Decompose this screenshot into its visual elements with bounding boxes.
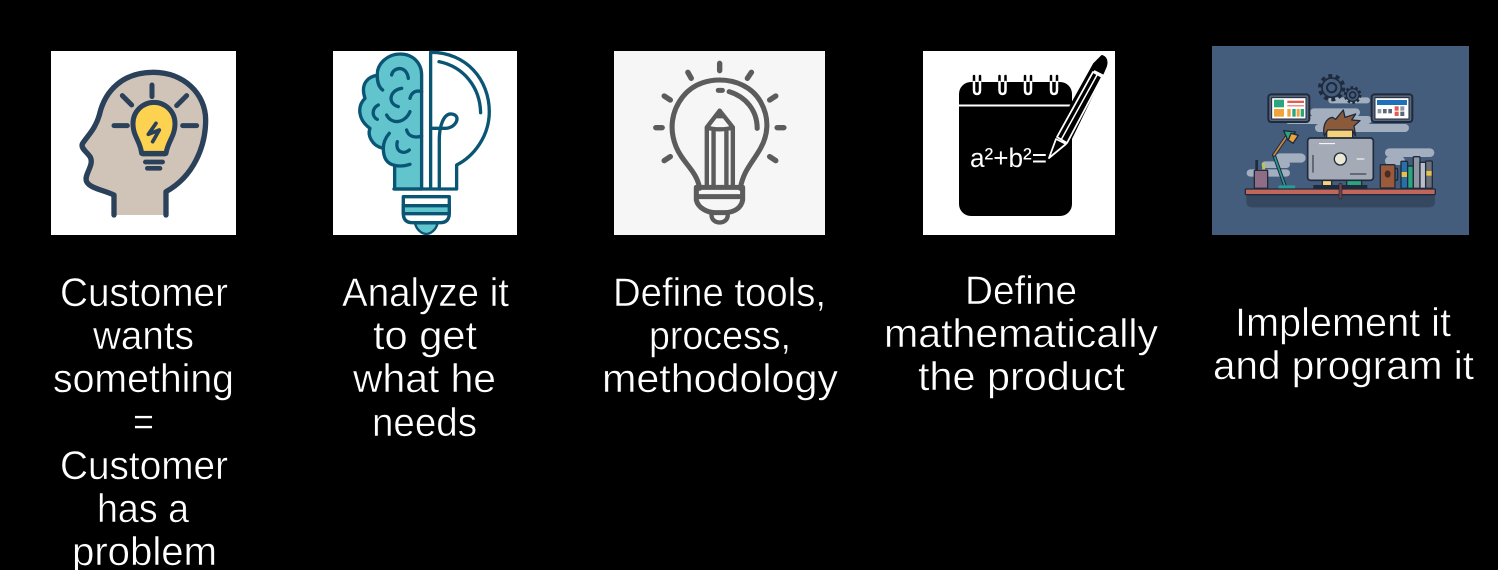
- icon: brain half: [360, 54, 422, 189]
- icon: spiral rings: [974, 76, 1057, 94]
- text: step 3 define tools: methodology: [602, 357, 838, 401]
- text: step 4 define mathematically: Define: [965, 269, 1077, 313]
- pencil cup: [1254, 160, 1268, 188]
- text: step 1 customer need: Customer: [60, 444, 228, 488]
- icon: bulb outline: [672, 80, 767, 188]
- icon: head outline: [82, 72, 206, 215]
- text: step 3 define tools: Define tools,: [613, 271, 826, 315]
- clouds: [1247, 97, 1434, 177]
- text: step 2 analyze: [342, 271, 509, 445]
- icon: half bulb outline: [394, 52, 489, 189]
- text: step 5 implement: [1213, 301, 1474, 388]
- formula text: a²+b²=: [970, 143, 1047, 173]
- icon: lightbulb: [133, 102, 175, 153]
- panel: developer at desk illustration: [1212, 46, 1469, 235]
- icon: pencil: [1046, 56, 1106, 163]
- icon: bulb base: [696, 187, 743, 213]
- icon: base stripe: [403, 206, 449, 214]
- text: step 1 customer need: =: [133, 400, 154, 444]
- desk top: [1245, 189, 1435, 195]
- icon: screw base: [403, 197, 449, 223]
- icon: filament: [431, 114, 457, 189]
- icon: bulb tip: [712, 215, 728, 222]
- person: [1322, 110, 1362, 186]
- text: step 1 customer need: something: [53, 357, 234, 401]
- icon: base tip: [415, 223, 438, 234]
- text: step 2 analyze: Analyze it: [342, 271, 509, 315]
- books: [1401, 157, 1432, 188]
- text: step 1 customer need: wants: [92, 314, 194, 358]
- icon: brain folds: [373, 69, 422, 166]
- right wall screen: [1372, 94, 1412, 122]
- text: step 1 customer need: Customer: [60, 271, 228, 315]
- icon: bulb highlight: [439, 62, 481, 113]
- panel: notebook with formula icon: [923, 51, 1115, 235]
- icon: bulb highlight: [729, 92, 757, 128]
- icon: notebook body: [959, 82, 1072, 216]
- icon: bulb rays: [114, 85, 197, 126]
- text: step 3 define tools: process,: [649, 314, 791, 358]
- text: step 2 analyze: to get: [373, 314, 477, 358]
- left wall screen: [1268, 94, 1309, 122]
- panel: head with lightbulb icon: [51, 51, 236, 235]
- desk shadow: [1246, 195, 1435, 207]
- desk strap: [1339, 183, 1342, 199]
- text: step 4 define mathematically: mathematically: [884, 312, 1158, 356]
- text: step 1 customer need: [53, 271, 234, 570]
- gears: [1320, 76, 1360, 103]
- laptop: [1308, 138, 1373, 189]
- coffee mug: [1380, 165, 1398, 188]
- icon: pencil: [707, 111, 733, 187]
- text: step 4 define mathematically: the product: [918, 355, 1125, 399]
- icon: rays: [656, 63, 784, 161]
- icon: bulb base: [143, 154, 165, 168]
- text: step 5 implement: Implement it: [1235, 301, 1451, 345]
- panel: lightbulb with pencil icon: [614, 51, 825, 235]
- desk lamp: [1274, 131, 1298, 187]
- text: step 2 analyze: what he: [352, 357, 496, 401]
- text: step 1 customer need: has a: [97, 487, 190, 531]
- panel: brain and lightbulb icon: [333, 51, 517, 235]
- icon: head silhouette: [82, 72, 206, 215]
- text: step 4 define mathematically: [884, 269, 1158, 399]
- icon: lightning bolt: [148, 123, 159, 142]
- icon: pencil tip: [715, 111, 724, 117]
- text: step 2 analyze: needs: [372, 401, 477, 445]
- text: step 5 implement: and program it: [1213, 344, 1474, 388]
- icon: notebook divider: [959, 104, 1071, 106]
- text: step 3 define tools: [602, 271, 838, 401]
